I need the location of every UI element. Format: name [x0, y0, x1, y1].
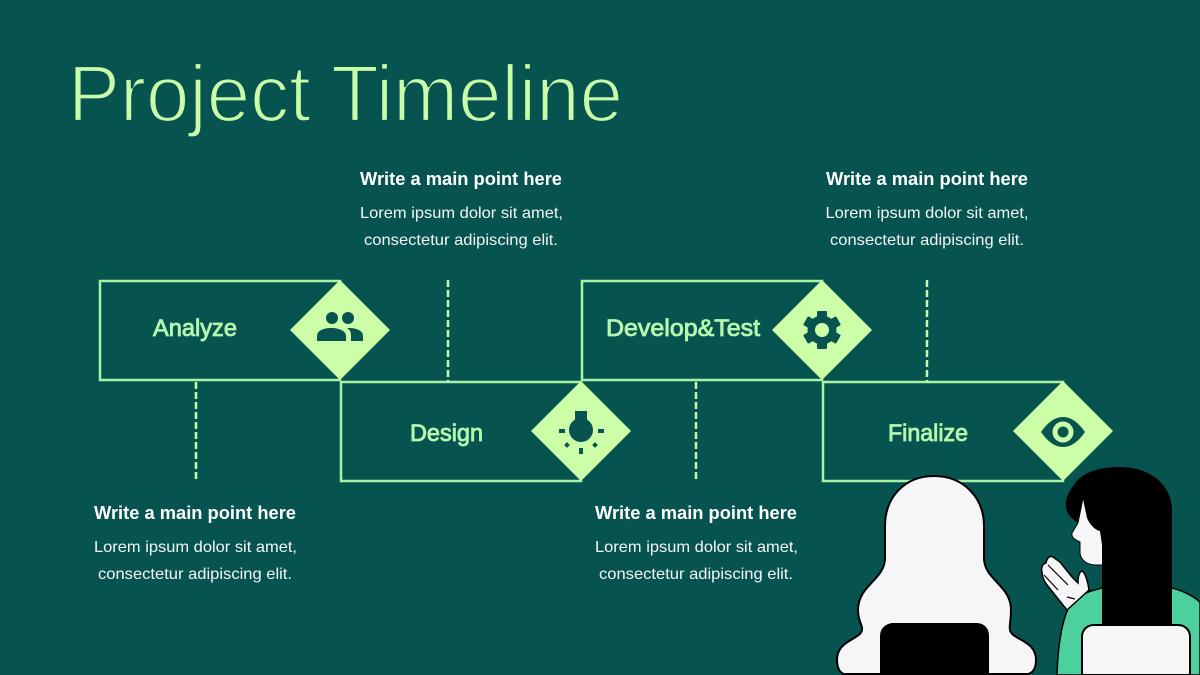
text block: Design note [360, 168, 563, 249]
step: Analyze: Analyze [153, 315, 237, 342]
icon: gear [803, 311, 841, 349]
text block: Develop and Test note: consectetur adipiscing elit. [599, 566, 793, 583]
text block: Develop and Test note: Write a main point here [595, 502, 797, 523]
text block: Finalize note: consectetur adipiscing elit. [830, 232, 1024, 249]
step: Develop and Test: Develop&Test [606, 315, 760, 342]
connector: Design [447, 280, 449, 381]
step: Design [341, 381, 631, 481]
icon: light bulb [559, 411, 604, 454]
connector: Develop and Test [695, 382, 697, 481]
icon: people [317, 312, 363, 341]
text block: Design note: Lorem ipsum dolor sit amet, [360, 205, 563, 222]
hair [1066, 467, 1172, 625]
hand [1042, 556, 1089, 610]
step: Analyze [100, 280, 390, 380]
text block: Analyze note: Lorem ipsum dolor sit amet, [94, 539, 297, 556]
step: Develop and Test [582, 280, 872, 380]
face [1072, 498, 1106, 565]
illustration: woman talking [1042, 467, 1200, 675]
text block: Finalize note [826, 168, 1028, 249]
text block: Develop and Test note [595, 502, 798, 583]
step: Design: Design [410, 420, 483, 447]
title: Project Timeline [68, 49, 623, 138]
text block: Design note: consectetur adipiscing elit. [364, 232, 558, 249]
text block: Finalize note: Write a main point here [826, 168, 1028, 189]
text block: Finalize note: Lorem ipsum dolor sit amet, [826, 205, 1028, 222]
connector: Finalize [926, 280, 928, 381]
icon: eye [1041, 417, 1085, 447]
connector: Analyze [195, 382, 197, 481]
step: Finalize [823, 381, 1113, 481]
text block: Design note: Write a main point here [360, 168, 562, 189]
body [1057, 588, 1200, 675]
illustration: woman seen from behind [837, 476, 1036, 675]
text block: Develop and Test note: Lorem ipsum dolor sit amet, [595, 539, 798, 556]
step: Finalize: Finalize [888, 420, 968, 447]
text block: Analyze note: Write a main point here [94, 502, 296, 523]
chair back [1082, 625, 1190, 675]
text block: Analyze note [94, 502, 297, 583]
text block: Analyze note: consectetur adipiscing elit. [98, 566, 292, 583]
